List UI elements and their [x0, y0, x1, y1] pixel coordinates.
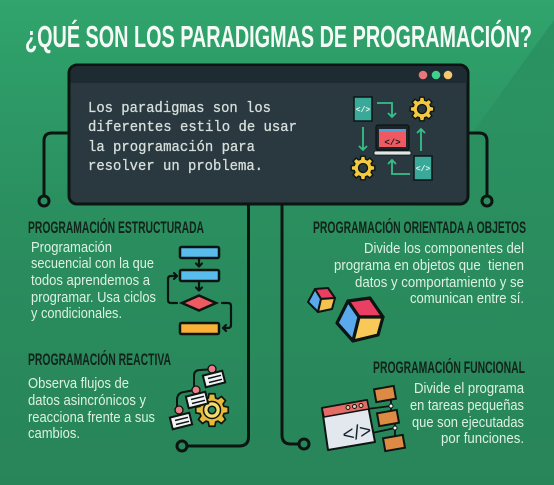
icon: programming cycle: </> [356, 106, 370, 115]
text: programación funcional: que son ejecutadas [412, 415, 524, 431]
text: programación estructurada: Programación [31, 240, 112, 256]
text: programación orientada a objetos: datos y comportamiento y se [355, 275, 524, 291]
text: programación funcional: en tareas pequeñas [410, 398, 524, 414]
intro text [88, 101, 297, 175]
text: programación reactiva: cambios. [28, 426, 80, 442]
text: programación estructurada: todos aprendemos a [31, 273, 151, 289]
text: programación funcional: Divide el programa [414, 381, 525, 397]
text: programación estructurada [31, 240, 156, 322]
heading: programación estructurada: PROGRAMACIÓN ESTRUCTURADA [28, 218, 204, 237]
panel: code window [69, 65, 468, 204]
text: programación funcional: por funciones. [441, 431, 524, 447]
text: programación reactiva: datos asincrónicos y [28, 393, 147, 409]
icon: programming cycle [351, 97, 434, 180]
connector lines [39, 133, 492, 451]
window title bar [70, 66, 467, 83]
intro text: diferentes estilo de usar [88, 120, 297, 136]
heading: programación reactiva: PROGRAMACIÓN REACTIVA [28, 350, 171, 369]
icon: browser window and function blocks: </> [341, 420, 373, 446]
icon: cubes [308, 288, 383, 341]
text: programación orientada a objetos [334, 241, 524, 307]
intro text: la programación para [88, 140, 255, 156]
text: programación funcional [410, 381, 525, 447]
intro text: Los paradigmas son los [88, 101, 271, 117]
icon: flowchart [168, 247, 231, 334]
text: programación reactiva [28, 376, 155, 442]
text: programación orientada a objetos: programa en objetos que tienen [334, 258, 524, 274]
intro text: resolver un problema. [88, 159, 263, 175]
text: programación reactiva: Observa flujos de [28, 376, 129, 392]
window buttons [419, 71, 452, 79]
text: programación orientada a objetos: Divide los componentes del [364, 241, 524, 257]
text: programación orientada a objetos: comunican entre sí. [410, 291, 524, 307]
text: programación estructurada: secuencial con la que [31, 256, 154, 272]
text: programación estructurada: y condicionales. [31, 306, 122, 322]
icon: programming cycle: </> [384, 138, 401, 148]
icon: reactive gear and cards [170, 365, 228, 429]
icon: programming cycle: </> [416, 165, 430, 174]
icon: browser window and function blocks [322, 386, 405, 451]
text: programación reactiva: reacciona frente a sus [28, 410, 155, 426]
text: programación estructurada: programar. Usa ciclos [31, 290, 156, 306]
